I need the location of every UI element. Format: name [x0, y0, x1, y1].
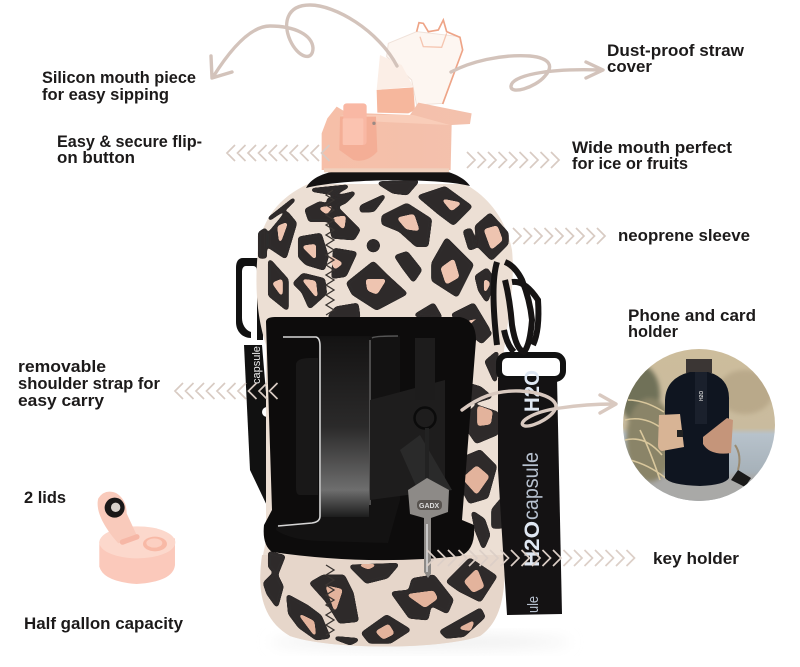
label: 2 lids: 2 lids [24, 488, 66, 507]
straw cover [387, 20, 463, 105]
label: shoulder strap: shoulder strap for [18, 374, 160, 393]
photo: black bottle [658, 359, 751, 487]
label: wide mouth: Wide mouth perfect [572, 138, 732, 157]
label: phone and card holder: Phone and card [628, 306, 756, 325]
shoulder strap left [236, 258, 277, 512]
label: neoprene sleeve: neoprene sleeve [618, 226, 750, 245]
strap buckle [499, 355, 563, 379]
chevrons: shoulder strap [175, 383, 278, 399]
clear window with black trim [264, 317, 476, 560]
silicon mouth piece [377, 55, 415, 113]
branded strap right: H2O [521, 370, 544, 412]
neoprene sleeve upper [256, 184, 513, 646]
branded strap right [498, 370, 562, 615]
collar band [306, 170, 470, 188]
label: silicon mouth piece: for easy sipping [42, 85, 169, 104]
label: straw cover: Dust-proof straw [607, 41, 745, 60]
label: straw cover: cover [607, 57, 652, 76]
label: shoulder strap: easy carry [18, 391, 105, 410]
shoulder strap left: H2O [265, 480, 277, 503]
label: flip-on button: on button [57, 148, 135, 167]
pink flip lid with straw cover [322, 20, 472, 172]
label: phone and card holder: holder [628, 322, 678, 341]
key holder with key [408, 338, 449, 578]
leopard print lower [265, 320, 502, 643]
branded strap right: capsule [520, 452, 543, 520]
photo: phone and card holder [620, 349, 775, 505]
label: half gallon capacity: Half gallon capacity [24, 614, 184, 633]
chevrons: wide mouth [467, 152, 559, 168]
bottle with leopard sleeve [236, 170, 570, 649]
icon: second lid [98, 492, 175, 584]
leopard print upper [260, 182, 507, 337]
photo background foliage [620, 365, 775, 505]
label: silicon mouth piece: Silicon mouth piece [42, 68, 196, 87]
label: flip-on button: Easy & secure flip- [57, 132, 202, 151]
carabiner clips right [494, 262, 538, 352]
swirl arrow: mouth piece [211, 5, 397, 78]
chevrons: key holder [427, 550, 634, 566]
cap body [322, 103, 472, 170]
label: key holder: key holder [653, 549, 739, 568]
photo: grass blades [625, 400, 668, 480]
easy flip button [339, 103, 377, 161]
chevrons: neoprene sleeve [513, 228, 605, 244]
lower sleeve tone [260, 555, 505, 646]
label: wide mouth: for ice or fruits [572, 154, 688, 173]
label: shoulder strap: removable [18, 357, 106, 376]
swirl arrow: phone holder [462, 391, 616, 426]
branded strap right: ule [525, 596, 542, 613]
chevrons: flip button [227, 145, 330, 161]
shoulder strap left: capsule [251, 346, 263, 384]
swirl arrow: straw cover [451, 56, 603, 90]
key holder with key: GADX [419, 503, 440, 510]
photo: black bottle: H2O [699, 391, 705, 401]
branded strap right: H2O [521, 521, 544, 567]
